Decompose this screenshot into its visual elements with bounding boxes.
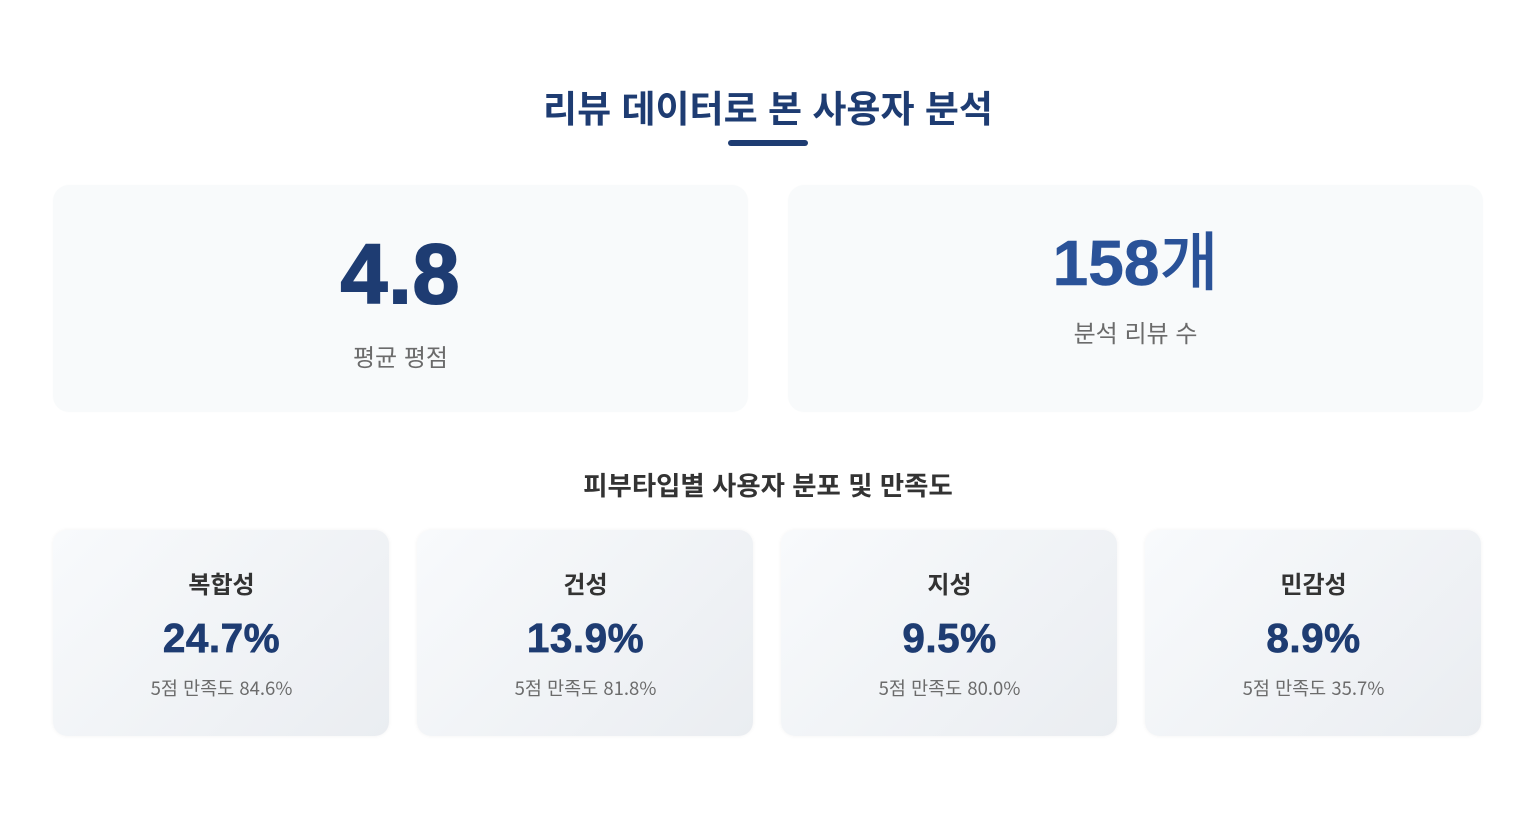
title underline: [728, 140, 808, 146]
share percentage: 8.9%: [1266, 615, 1361, 661]
skin type name: 지성: [927, 565, 972, 600]
review count label: 분석 리뷰 수: [1074, 314, 1197, 349]
panel: dry skin: [417, 530, 753, 736]
share percentage: 9.5%: [902, 615, 997, 661]
panel: average rating: [53, 185, 748, 412]
average rating value: 4.8: [341, 227, 460, 321]
review count value: 158개: [1053, 212, 1218, 304]
average rating label: 평균 평점: [353, 338, 448, 373]
skin type name: 건성: [563, 565, 608, 600]
title: 리뷰 데이터로 본 사용자 분석: [543, 79, 993, 133]
section heading: 피부타입별 사용자 분포 및 만족도: [583, 464, 953, 503]
panel: review count: [788, 185, 1483, 412]
share percentage: 13.9%: [527, 615, 644, 661]
skin type name: 민감성: [1280, 565, 1347, 600]
satisfaction: 5점 만족도 35.7%: [1243, 675, 1384, 701]
satisfaction: 5점 만족도 81.8%: [515, 675, 656, 701]
panel: sensitive skin: [1145, 530, 1481, 736]
panel: combination skin: [53, 530, 389, 736]
skin type name: 복합성: [188, 565, 255, 600]
satisfaction: 5점 만족도 84.6%: [151, 675, 292, 701]
panel: oily skin: [781, 530, 1117, 736]
share percentage: 24.7%: [163, 615, 280, 661]
satisfaction: 5점 만족도 80.0%: [879, 675, 1020, 701]
